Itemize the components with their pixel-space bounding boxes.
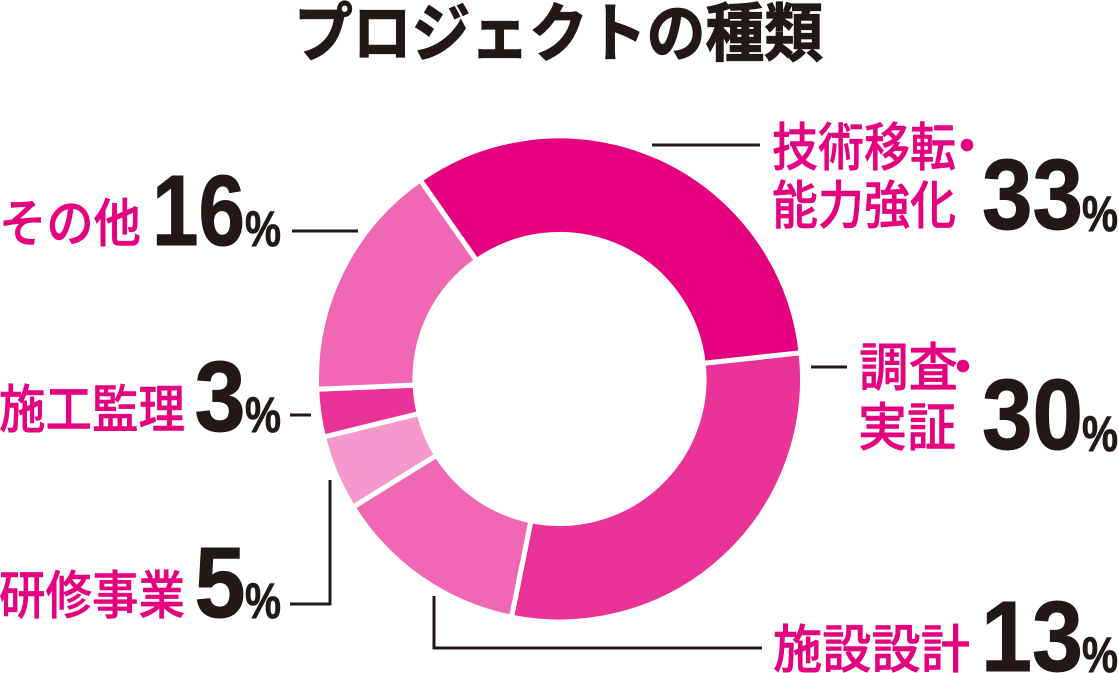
leader line: facility design — [434, 596, 762, 648]
leader line: survey — [811, 366, 847, 368]
label: technology transfer 33% — [772, 119, 1118, 251]
label: other 16%: その他 — [0, 196, 141, 254]
label: supervision 3%: 3 — [194, 341, 246, 453]
label: other 16%: 16 — [152, 155, 245, 267]
label: other 16%: % — [245, 201, 281, 257]
label: facility design 13% — [773, 581, 1118, 673]
label: training 5%: 研修事業 — [0, 568, 185, 626]
label: training 5%: 5 — [194, 527, 246, 639]
leader line: technology transfer — [652, 144, 760, 146]
leader line: supervision — [290, 414, 311, 416]
label: training 5% — [0, 527, 281, 639]
label: supervision 3% — [0, 341, 281, 453]
label: survey 30%: 30 — [982, 359, 1083, 471]
segment: facility design 13% — [353, 455, 531, 617]
label: training 5%: % — [245, 573, 281, 629]
segment: technology transfer 33% — [420, 136, 801, 363]
label: supervision 3%: 施工監理 — [0, 382, 185, 440]
leader line: other — [292, 230, 358, 232]
label: other 16% — [0, 155, 281, 267]
label: survey 30%: ・ — [937, 340, 989, 398]
donut chart — [316, 136, 803, 622]
label: supervision 3%: % — [245, 387, 281, 443]
label: technology transfer 33%: 技術移転 — [772, 120, 956, 178]
label: survey 30% — [858, 340, 1118, 471]
segment: training 5% — [324, 414, 437, 507]
segment: supervision 3% — [317, 385, 419, 437]
segment: other 16% — [316, 180, 477, 389]
label: technology transfer 33%: 能力強化 — [772, 178, 956, 236]
segment: survey 30% — [512, 353, 803, 622]
label: technology transfer 33%: ・ — [941, 119, 993, 177]
label: survey 30%: 調査 — [859, 340, 958, 398]
label: technology transfer 33%: 33 — [982, 139, 1083, 251]
title: プロジェクトの種類 — [294, 0, 823, 70]
leader line: training — [290, 480, 330, 604]
label: survey 30%: 実証 — [858, 400, 956, 458]
